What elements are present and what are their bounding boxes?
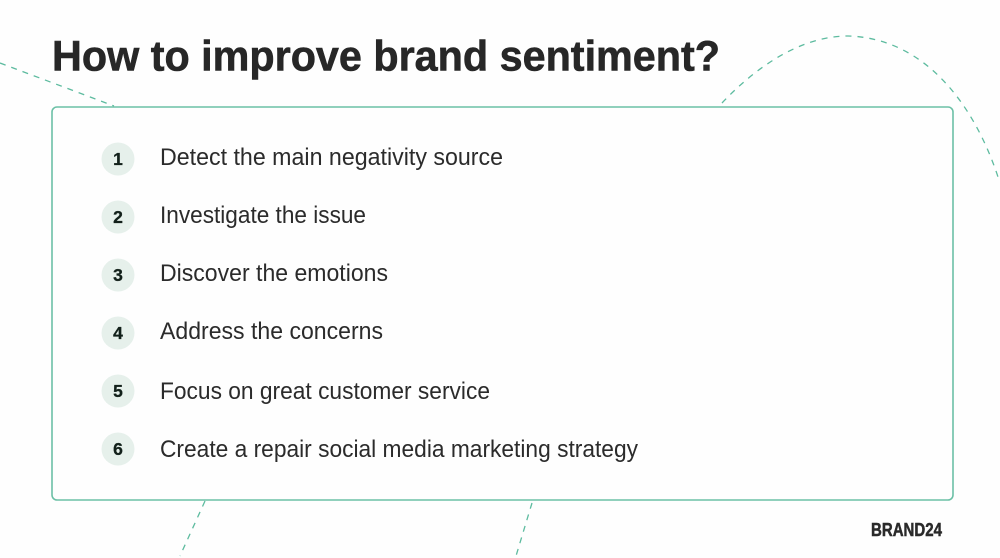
step 1: Detect the main negativity source	[160, 144, 503, 171]
step 4: 4	[113, 323, 123, 343]
step 3: 3	[113, 265, 123, 285]
step 1: 1	[113, 149, 123, 169]
step 1	[102, 142, 503, 176]
panel: steps list	[52, 107, 953, 500]
step 2: 2	[113, 207, 123, 227]
step 6	[102, 432, 639, 466]
step 4: Address the concerns	[160, 318, 383, 345]
step 5	[102, 374, 490, 408]
step 4	[102, 316, 383, 350]
step 3	[102, 258, 388, 292]
step 6: Create a repair social media marketing strategy	[160, 436, 639, 463]
step 5: Focus on great customer service	[160, 378, 490, 405]
title: How to improve brand sentiment?	[52, 34, 720, 80]
step 2	[102, 200, 366, 234]
logo: BRAND24: BRAND24	[871, 520, 942, 540]
step 5: 5	[113, 381, 123, 401]
step 3: Discover the emotions	[160, 260, 388, 287]
step 2: Investigate the issue	[160, 202, 366, 229]
step 6: 6	[113, 439, 123, 459]
